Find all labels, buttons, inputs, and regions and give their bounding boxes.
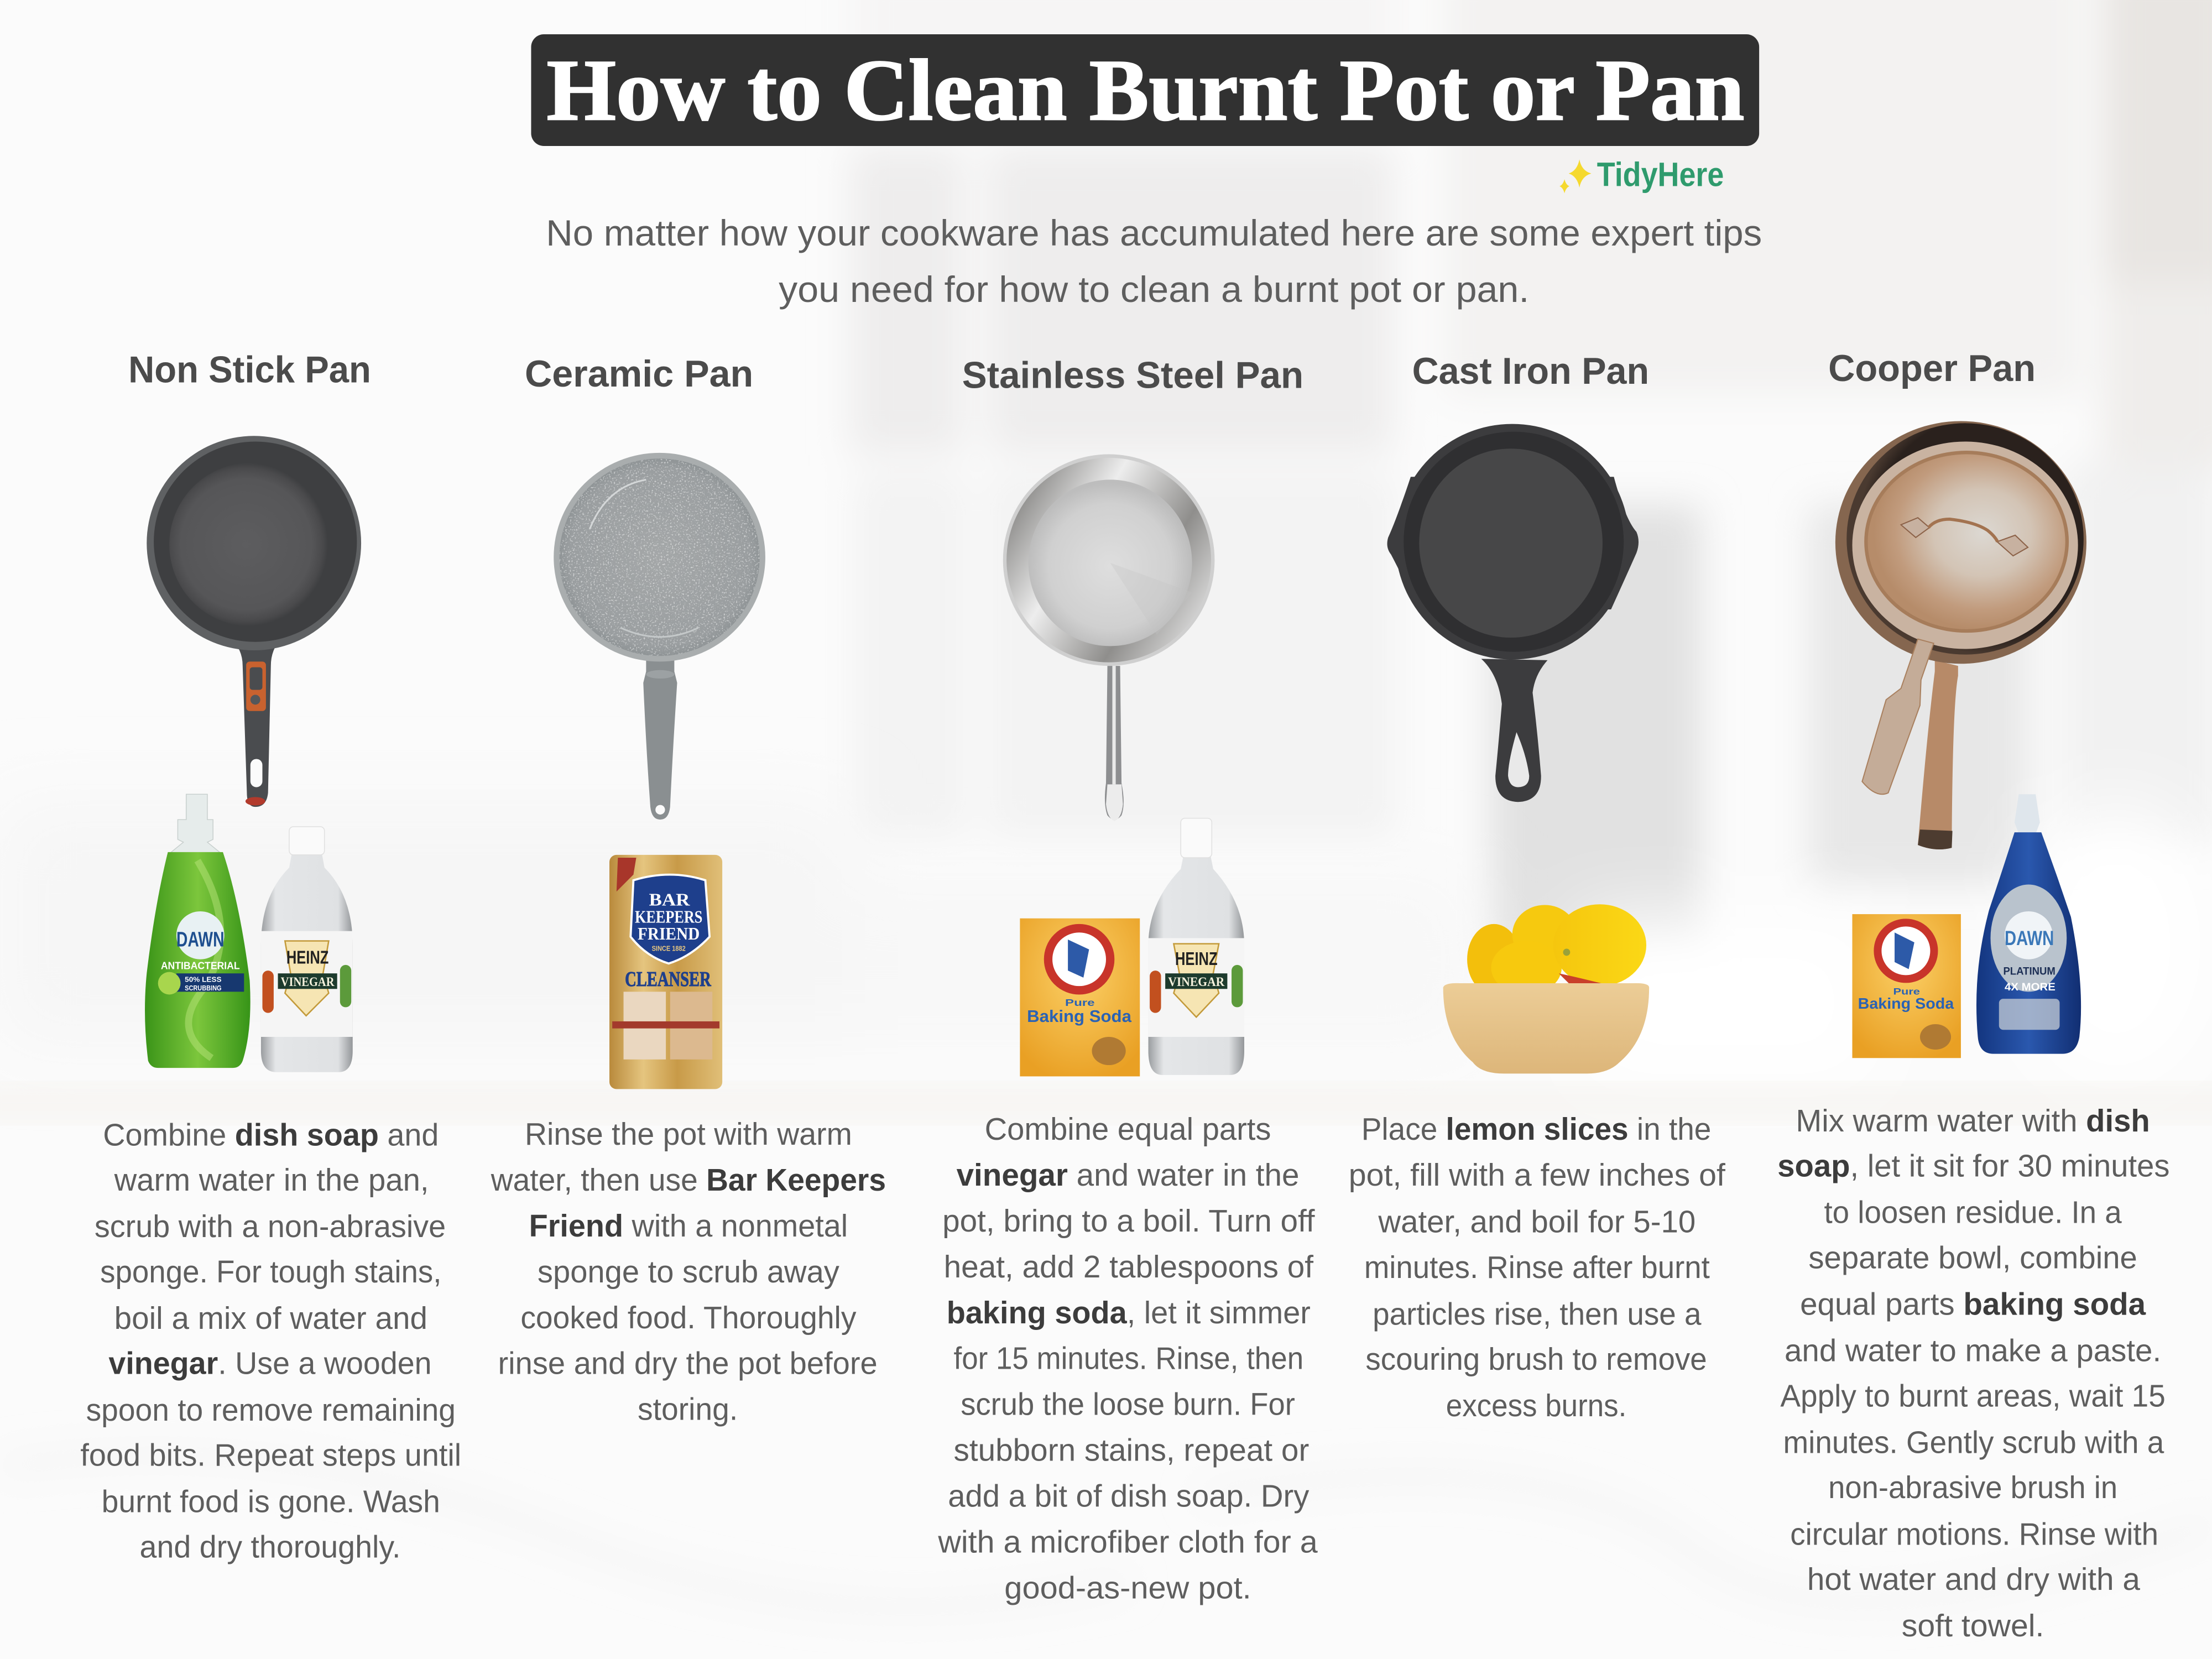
text: ceramic pan instructions: Friend with a nonmetal [529,1209,848,1244]
text: stainless steel pan instructions: Combine equal parts [985,1112,1271,1147]
logo: TidyHere [1559,156,1724,194]
icon: vinegar bottle: VINEGAR [1168,975,1225,989]
heading: Non Stick Pan: Non Stick Pan [128,349,371,390]
text: non stick pan instructions: vinegar. Use a wooden [108,1347,432,1381]
text: ceramic pan instructions: sponge to scrub away [538,1255,839,1290]
text: cast iron pan instructions: particles rise, then use a [1373,1297,1702,1332]
icon: lemons in wooden bowl [1443,904,1649,1073]
text: stainless steel pan instructions: stubborn stains, repeat or [953,1433,1309,1468]
icon: baking soda box [1020,919,1140,1076]
icon: vinegar bottle: HEINZ [286,947,328,968]
icon: vinegar bottle [261,827,353,1072]
text: copper pan instructions: circular motions. Rinse with [1790,1517,2158,1552]
text: copper pan instructions: hot water and dry with a [1807,1562,2140,1597]
text: cast iron pan instructions [1349,1112,1725,1423]
text: copper pan instructions: to loosen residue. In a [1824,1196,2122,1230]
text: non stick pan instructions [80,1118,461,1564]
text: stainless steel pan instructions: for 15 minutes. Rinse, then [953,1342,1303,1376]
icon: vinegar bottle: HEINZ [1175,949,1218,969]
text: copper pan instructions: non-abrasive brush in [1828,1470,2117,1505]
text: non stick pan instructions: spoon to remove remaining [86,1393,456,1428]
icon: blue dish soap bottle: DAWN [2005,927,2054,950]
icon: blue dish soap bottle [1976,794,2081,1054]
icon: green dish soap bottle: DAWN [176,928,225,952]
heading: Cooper Pan: Cooper Pan [1828,348,2036,389]
icon: Bar Keepers Friend can: SINCE 1882 [652,944,686,952]
text: cast iron pan instructions: pot, fill with a few inches of [1349,1158,1725,1193]
icon: green dish soap bottle: ANTIBACTERIAL [161,960,240,972]
text: copper pan instructions: and water to make a paste. [1785,1334,2161,1369]
icon: baking soda box: Pure [1065,997,1095,1008]
text: stainless steel pan instructions: heat, add 2 tablespoons of [944,1250,1313,1285]
subtitle: No matter how your cookware has accumulated here are some expert tips [546,213,1762,254]
text: non stick pan instructions: warm water in the pan, [114,1163,429,1198]
text: copper pan instructions [1777,1104,2169,1644]
heading: Cast Iron Pan: Cast Iron Pan [1412,351,1649,392]
icon: baking soda box: Pure [1893,986,1920,997]
text: non stick pan instructions: and dry thoroughly. [140,1530,400,1564]
text: stainless steel pan instructions: pot, bring to a boil. Turn off [942,1204,1315,1239]
icon: Bar Keepers Friend can [609,855,722,1089]
text: non stick pan instructions: food bits. Repeat steps until [80,1438,461,1473]
icon: non stick pan [147,436,361,807]
text: cast iron pan instructions: scouring brush to remove [1365,1342,1707,1377]
text: stainless steel pan instructions: good-as-new pot. [1004,1571,1251,1605]
icon: green dish soap bottle: SCRUBBING [185,984,222,992]
text: ceramic pan instructions: storing. [638,1392,738,1427]
icon: copper pan [1835,421,2086,849]
text: ceramic pan instructions [491,1117,886,1427]
icon: green dish soap bottle: 50% LESS [185,975,222,984]
icon: baking soda box [1852,914,1961,1058]
text: stainless steel pan instructions: with a microfiber cloth for a [937,1525,1318,1559]
icon: blue dish soap bottle: 4X MORE [2005,982,2056,993]
text: ceramic pan instructions: cooked food. Thoroughly [520,1301,857,1335]
icon: Bar Keepers Friend can: CLEANSER [625,968,711,991]
heading: Ceramic Pan: Ceramic Pan [525,353,753,395]
text: stainless steel pan instructions: baking soda, let it simmer [947,1296,1311,1331]
text: non stick pan instructions: boil a mix of water and [114,1301,427,1336]
text: copper pan instructions: Apply to burnt areas, wait 15 [1780,1379,2166,1413]
title banner: How to Clean Burnt Pot or Pan [547,42,1744,139]
text: cast iron pan instructions: water, and boil for 5-10 [1378,1204,1695,1239]
text: ceramic pan instructions: water, then use Bar Keepers [491,1163,886,1198]
text: copper pan instructions: separate bowl, combine [1808,1240,2137,1275]
icon: blue dish soap bottle: PLATINUM [2003,966,2056,978]
icon: baking soda box: Baking Soda [1858,995,1954,1012]
logo: TidyHere: TidyHere [1597,156,1724,194]
subtitle: you need for how to clean a burnt pot or pan. [779,269,1529,310]
heading: Stainless Steel Pan: Stainless Steel Pan [962,355,1303,397]
text: stainless steel pan instructions [937,1112,1318,1605]
icon: vinegar bottle [1149,818,1244,1075]
icon: ceramic pan [554,453,765,820]
text: non stick pan instructions: scrub with a non-abrasive [95,1209,446,1244]
text: cast iron pan instructions: Place lemon slices in the [1361,1112,1711,1147]
text: non stick pan instructions: sponge. For tough stains, [100,1255,441,1290]
text: non stick pan instructions: Combine dish soap and [103,1118,439,1152]
icon: vinegar bottle: VINEGAR [281,975,335,989]
text: copper pan instructions: soap, let it sit for 30 minutes [1777,1149,2169,1184]
subtitle [546,213,1762,310]
text: stainless steel pan instructions: vinegar and water in the [957,1158,1299,1193]
text: ceramic pan instructions: Rinse the pot with warm [525,1117,852,1152]
text: stainless steel pan instructions: scrub the loose burn. For [961,1387,1295,1422]
text: cast iron pan instructions: minutes. Rinse after burnt [1364,1250,1710,1285]
text: copper pan instructions: equal parts baking soda [1800,1287,2146,1322]
icon: Bar Keepers Friend can: KEEPERS [635,907,702,926]
text: copper pan instructions: soft towel. [1902,1609,2044,1644]
text: cast iron pan instructions: excess burns. [1446,1389,1626,1423]
icon: cast iron pan [1387,424,1639,802]
text: stainless steel pan instructions: add a bit of dish soap. Dry [948,1479,1310,1514]
icon: Bar Keepers Friend can: FRIEND [638,924,700,943]
text: copper pan instructions: Mix warm water with dish [1796,1104,2150,1139]
icon: stainless steel pan [1003,454,1214,821]
text: non stick pan instructions: burnt food is gone. Wash [102,1485,440,1520]
text: ceramic pan instructions: rinse and dry the pot before [498,1347,878,1381]
icon: baking soda box: Baking Soda [1027,1007,1132,1026]
icon: green dish soap bottle [145,794,251,1068]
icon: Bar Keepers Friend can: BAR [649,890,691,910]
text: copper pan instructions: minutes. Gently scrub with a [1783,1426,2164,1460]
